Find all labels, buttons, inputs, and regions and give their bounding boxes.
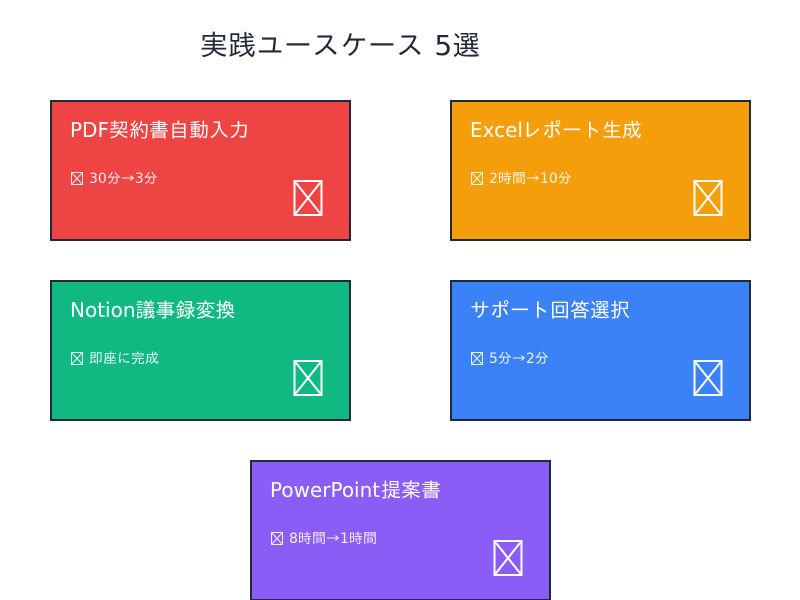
small icon: clock placeholder: [472, 352, 482, 364]
time saving: support: 5分→2分: [489, 351, 549, 367]
icon: PowerPoint placeholder: [494, 541, 522, 575]
title: 実践ユースケース 5選: [200, 29, 480, 62]
time saving: PDF: 30分→3分: [89, 171, 158, 187]
icon: support placeholder: [694, 361, 722, 395]
time saving: PowerPoint: 8時間→1時間: [289, 531, 377, 547]
small icon: clock placeholder: [272, 532, 282, 544]
time saving: Excel: 2時間→10分: [489, 171, 572, 187]
small icon: clock placeholder: [72, 172, 82, 184]
icon: Excel placeholder: [694, 181, 722, 215]
panel: PDF contract auto entry: [51, 101, 350, 240]
heading: support: サポート回答選択: [470, 298, 630, 322]
small icon: clock placeholder: [472, 172, 482, 184]
heading: Notion: Notion議事録変換: [70, 298, 236, 322]
time saving: Notion: 即座に完成: [89, 351, 159, 367]
heading: Excel: Excelレポート生成: [470, 118, 642, 142]
panel: PowerPoint proposal: [251, 461, 550, 600]
heading: PDF contract: PDF契約書自動入力: [70, 118, 249, 142]
panel: support reply selection: [451, 281, 750, 420]
small icon: clock placeholder: [72, 352, 82, 364]
heading: PowerPoint: PowerPoint提案書: [270, 478, 441, 502]
icon: PDF placeholder: [294, 181, 322, 215]
panel: Excel report generation: [451, 101, 750, 240]
icon: Notion placeholder: [294, 361, 322, 395]
panel: Notion minutes conversion: [51, 281, 350, 420]
